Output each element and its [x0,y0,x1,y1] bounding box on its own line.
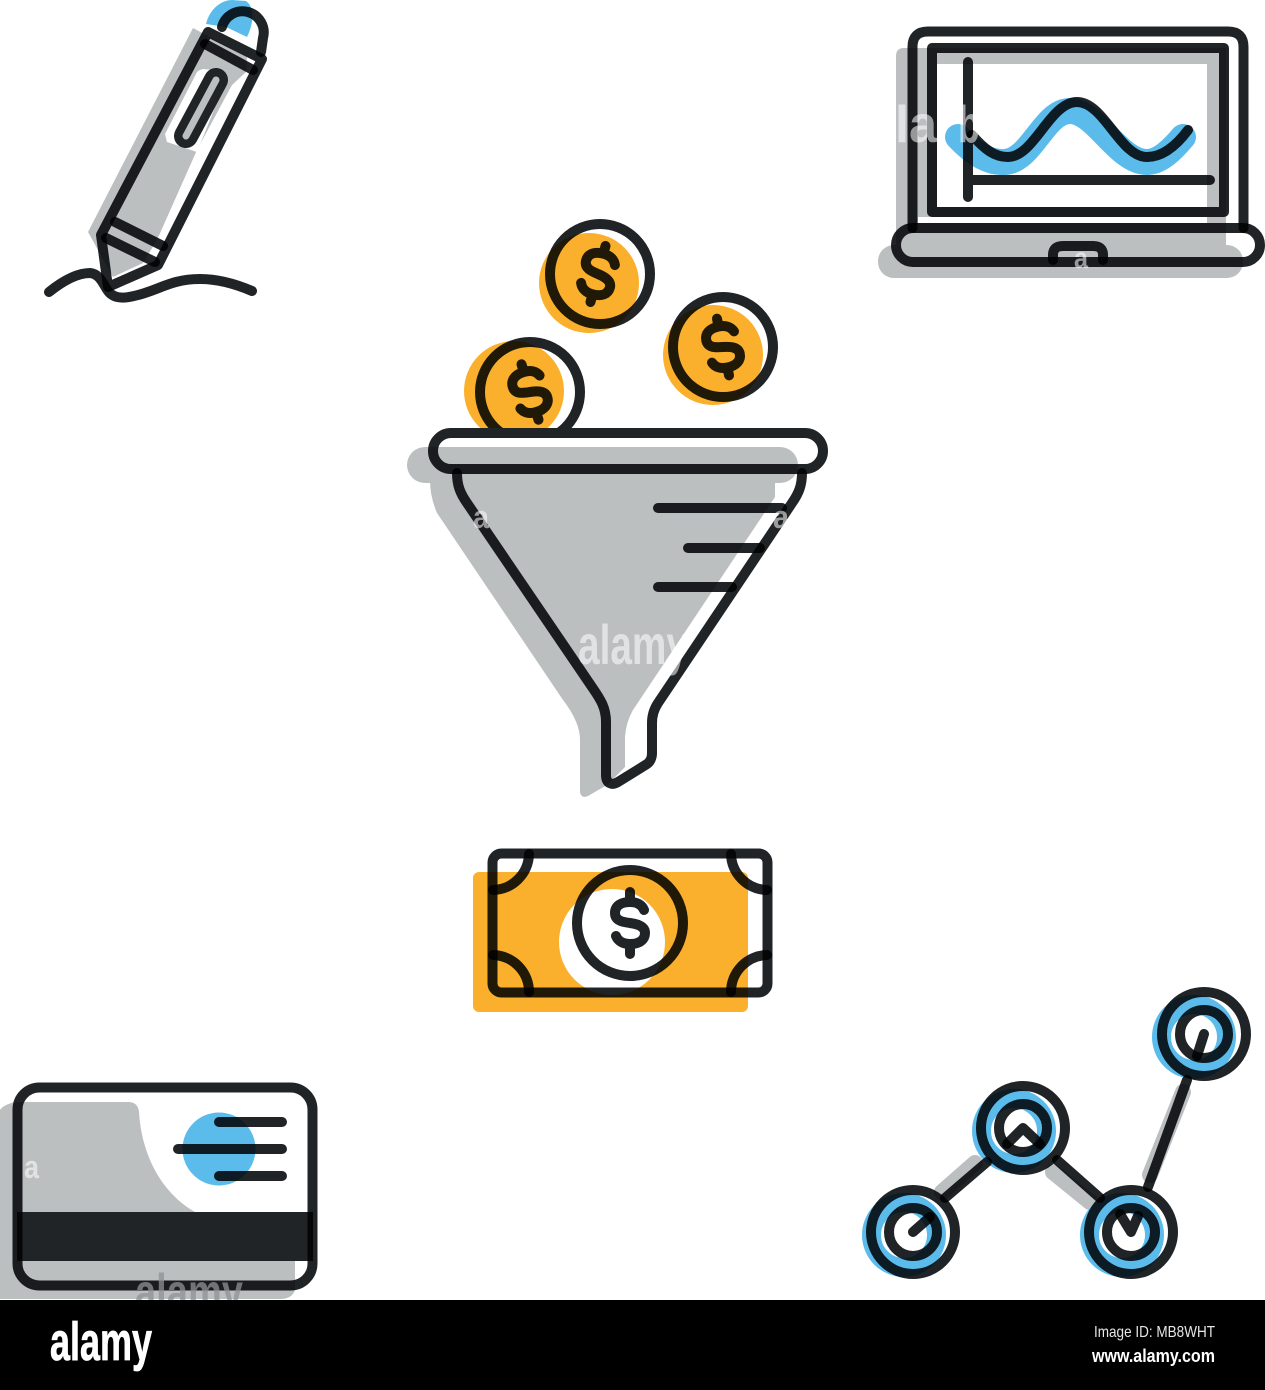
node blue rings [872,1004,1226,1268]
chart axes [968,62,1210,197]
chart blue wave [958,111,1183,162]
laptop screen [932,48,1224,212]
pencil blue cap accent [206,0,253,37]
laptop watermark [895,96,1088,275]
icon: credit card [0,1088,313,1320]
image id: Image ID: MB8WHT [1094,1324,1215,1341]
icon: line chart with nodes [871,992,1246,1274]
card outline [18,1088,312,1286]
card grey shadow [0,1102,295,1299]
connector lines [945,1080,1187,1198]
footer bar [0,1300,1265,1390]
pencil bands [106,44,253,262]
pencil scribble [49,273,252,298]
banknote centre coin [577,870,683,976]
card watermark: a [24,1149,39,1185]
node rings [871,992,1246,1274]
banknote outline [492,854,768,992]
node inner ticks [913,1034,1204,1232]
laptop watermark: la [895,96,938,154]
pencil body outline [101,32,262,287]
coin right [663,297,773,405]
card watermark: alamy [135,1264,243,1320]
icon: banknote [473,854,768,1012]
icon: coins [464,224,773,442]
pencil cap [222,11,264,52]
icon: laptop with chart [878,32,1260,278]
banknote orange fill [473,872,748,1012]
chart line [972,102,1188,157]
laptop base [896,228,1260,262]
funnel measure ticks [658,508,782,587]
pencil grey shadow [88,28,247,277]
funnel body outline [457,473,802,784]
coin top [539,224,650,333]
funnel watermark: alamy [578,613,688,676]
pencil clip white highlight [165,69,222,152]
icon: funnel [407,433,823,797]
funnel watermark [473,499,789,676]
pencil clip [186,80,216,136]
funnel watermark: a [473,499,489,535]
alamy logo: alamy [50,1312,152,1372]
laptop touchpad notch [1053,246,1103,260]
laptop grey shadow [878,36,1255,278]
funnel watermark: a [773,499,789,535]
laptop watermark: a [1074,242,1088,275]
connector shadows [942,1092,1183,1202]
laptop outline [912,32,1244,228]
card watermark [24,1160,243,1300]
website: www.alamy.com [1091,1346,1215,1366]
coin left [464,341,580,442]
banknote corners [493,854,767,992]
funnel rim [433,433,823,469]
banknote dollar sign [615,892,645,954]
laptop watermark: b [958,96,980,154]
card blue circle [182,1112,256,1186]
funnel grey shadow [407,447,798,797]
card magnetic stripe [17,1212,313,1261]
card text lines [178,1122,282,1176]
icon: pencil [49,0,264,298]
banknote white circle [559,889,665,995]
